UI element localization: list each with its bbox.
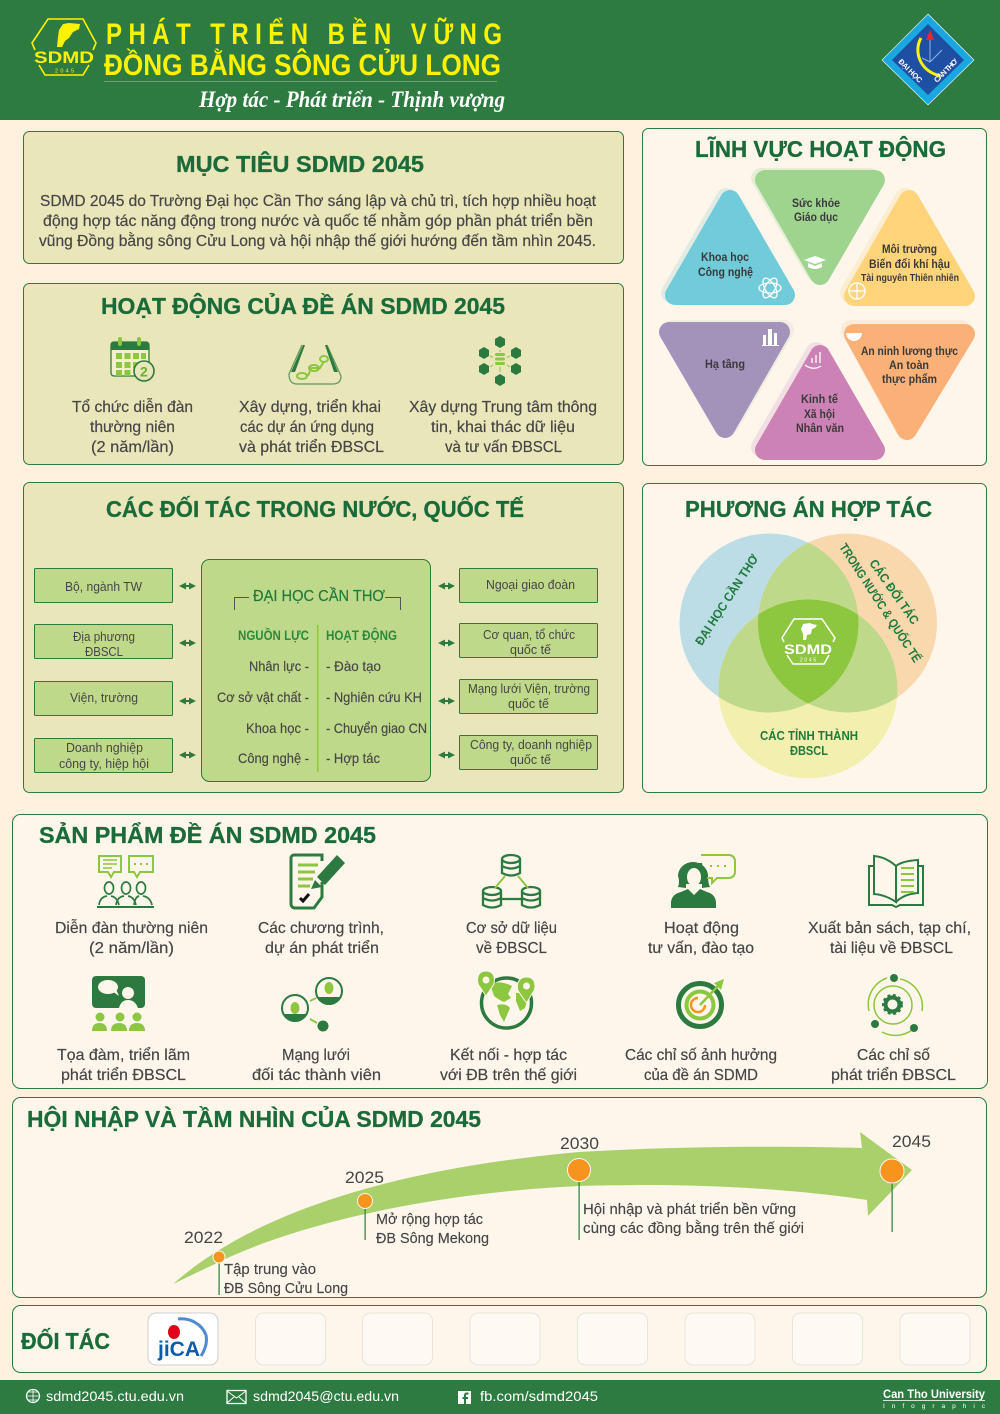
text: dự án [239, 398, 384, 456]
centre box: Đại học Cần Thơ: Công nghệ - [238, 750, 309, 766]
box: Viện trường: Viện, trường [70, 690, 138, 705]
item: chương trình: dự án phát triển [265, 939, 379, 957]
item: chỉ số ảnh hưởng: của đề án SDMD [644, 1067, 758, 1084]
text: diễn đàn: (2 năm/lần) [91, 439, 174, 456]
text: diễn đàn [72, 397, 193, 456]
triangle: môi trường: Môi trường [882, 242, 937, 256]
triangle: môi trường [849, 198, 965, 299]
item: chỉ số ảnh hưởng: Các chỉ số ảnh hưởng [625, 1047, 777, 1064]
item: kết nối: với ĐB trên thế giới [440, 1067, 577, 1084]
label: các tỉnh thành: ĐBSCL [790, 744, 828, 758]
item: mạng lưới [252, 978, 381, 1084]
timeline arrow [173, 1132, 912, 1284]
Can Tho University logo [882, 14, 974, 105]
text: mục tiêu: vũng Đồng bằng sông Cửu Long và hội nhập thế giới hướng đến tầm nhìn 2045. [39, 231, 596, 250]
item: tọa đàm [57, 976, 190, 1084]
title: PHÁT TRIỂN BỀN VỮNG [106, 16, 502, 51]
website: sdmd2045.ctu.edu.vn [46, 1388, 184, 1404]
header band [0, 0, 1000, 120]
text: mục tiêu [39, 193, 597, 250]
milestone: 2025 [345, 1168, 489, 1247]
item: cơ sở dữ liệu: Cơ sở dữ liệu [466, 920, 557, 937]
milestone: 2030: cùng các đồng bằng trên thế giới [583, 1220, 804, 1237]
milestone: 2030: 2030 [560, 1134, 599, 1153]
item: diễn đàn [55, 856, 208, 957]
item: mạng lưới: Mạng lưới [282, 1047, 350, 1064]
label: các đối tác: TRONG NƯỚC & QUỐC TẾ [836, 540, 925, 665]
credit: Can Tho University [883, 1387, 986, 1410]
item: chương trình [258, 855, 384, 957]
text: trung tâm: và tư vấn ĐBSCL [445, 439, 562, 456]
triangle: an ninh lương thực: An toàn [889, 358, 929, 372]
heading: phương án: PHƯƠNG ÁN HỢP TÁC [685, 495, 932, 522]
item: chỉ số phát triển: phát triển ĐBSCL [831, 1066, 956, 1084]
item: mạng lưới: đối tác thành viên [252, 1067, 381, 1084]
milestone: 2022 [184, 1228, 348, 1297]
triangle: an ninh lương thực [846, 330, 965, 430]
box: Cơ quan: Cơ quan, tổ chức [483, 627, 575, 642]
item: tọa đàm: Tọa đàm, triển lãm [57, 1046, 190, 1064]
panel: đối tác [12, 1306, 986, 1372]
heading: đối tác: ĐỐI TÁC [21, 1327, 110, 1354]
triangle: sức khỏe giáo dục: Sức khỏe [792, 196, 840, 210]
text: trung tâm: Xây dựng Trung tâm thông [409, 399, 597, 416]
item: chỉ số phát triển [831, 974, 956, 1084]
box: Địa phương: ĐBSCL [85, 644, 123, 659]
partner logo: JICA: jiCA [157, 1338, 200, 1361]
arrows: left [179, 582, 196, 758]
panel: hội nhập [12, 1098, 986, 1298]
centre box: Đại học Cần Thơ [202, 560, 430, 782]
milestone: 2025: 2025 [345, 1168, 384, 1187]
heading: sản phẩm: SẢN PHẨM ĐỀ ÁN SDMD 2045 [39, 820, 376, 848]
triangle: sức khỏe giáo dục [761, 178, 875, 275]
item: cơ sở dữ liệu: về ĐBSCL [476, 940, 547, 957]
Can Tho University logo: ĐẠI HỌC [897, 57, 925, 85]
triangle: sức khỏe giáo dục: Giáo dục [794, 210, 838, 224]
SDMD logo: venn: SDMD [784, 641, 832, 657]
item: tư vấn [648, 855, 754, 957]
SDMD logo [32, 19, 96, 75]
triangle: an ninh lương thực: An ninh lương thực [861, 344, 958, 358]
triangle: kinh tế xã hội nhân văn: Kinh tế [801, 392, 838, 406]
centre box: Đại học Cần Thơ: HOẠT ĐỘNG [326, 628, 397, 643]
triangle: khoa học công nghệ: Công nghệ [698, 265, 753, 279]
email: sdmd2045@ctu.edu.vn [253, 1388, 399, 1404]
icon: calendar [111, 337, 154, 381]
box: Viện trường [34, 682, 172, 716]
item: xuất bản [808, 856, 971, 957]
panel: đối tác trong nước, quốc tế [24, 482, 624, 792]
SDMD logo: SDMD [34, 48, 94, 67]
text: trung tâm: tin, khai thác dữ liệu [431, 419, 575, 436]
triangle: kinh tế xã hội nhân văn [761, 352, 875, 450]
SDMD logo: venn [782, 619, 835, 664]
box: Công ty [460, 736, 598, 770]
partner logo: JICA [148, 1313, 218, 1365]
panel: sản phẩm [12, 814, 988, 1088]
item: chỉ số phát triển: Các chỉ số [857, 1047, 930, 1064]
triangle: hạ tầng [669, 329, 784, 428]
item: tư vấn: Hoạt động [664, 920, 739, 937]
SDMD logo: venn: 2045 [800, 658, 816, 664]
centre box: Đại học Cần Thơ: Nhân lực - [249, 658, 309, 674]
text: diễn đàn: thường niên [90, 419, 175, 436]
credit: Can Tho University: Can Tho University [883, 1387, 985, 1401]
panel: lĩnh vực hoạt động [642, 128, 986, 466]
title: ĐỒNG BẰNG SÔNG CỬU LONG [104, 48, 501, 82]
item: xuất bản: Xuất bản sách, tạp chí, [808, 920, 971, 937]
item: tọa đàm: phát triển ĐBSCL [61, 1066, 186, 1084]
label: các tỉnh thành [760, 728, 858, 758]
box: Doanh nghiệp: công ty, hiệp hội [59, 756, 149, 771]
centre box: Đại học Cần Thơ: - Chuyển giao CN [326, 720, 427, 736]
milestone: 2022: Tập trung vào [224, 1261, 316, 1278]
box: Công ty: Công ty, doanh nghiệp [470, 737, 592, 752]
milestone: 2022: ĐB Sông Cửu Long [224, 1280, 348, 1297]
slogan: Hợp tác - Phát triển - Thịnh vượng [198, 87, 505, 112]
triangle: an ninh lương thực: thực phẩm [882, 372, 937, 386]
triangle: kinh tế xã hội nhân văn: Xã hội [804, 407, 835, 421]
text: mục tiêu: SDMD 2045 do Trường Đại học Cần Thơ sáng lập và chủ trì, tích hợp nhiều hoạt [40, 193, 597, 210]
milestone: 2022: 2022 [184, 1228, 223, 1247]
heading: lĩnh vực: LĨNH VỰC HOẠT ĐỘNG [695, 135, 946, 162]
centre box: Đại học Cần Thơ: - Nghiên cứu KH [326, 689, 422, 705]
item: kết nối: Kết nối - hợp tác [450, 1047, 567, 1064]
box: Địa phương [34, 624, 172, 659]
box: Công ty: quốc tế [510, 752, 552, 767]
text: dự án: và phát triển ĐBSCL [239, 438, 384, 456]
milestone: 2045 [880, 1132, 931, 1232]
box: Ngoại giao đoàn [460, 568, 598, 602]
heading: mục tiêu: MỤC TIÊU SDMD 2045 [176, 150, 424, 177]
triangle: môi trường: Biến đổi khí hậu [869, 257, 950, 271]
icon: map route [289, 345, 341, 384]
centre box: Đại học Cần Thơ: - Hợp tác [326, 750, 380, 766]
item: diễn đàn: Diễn đàn thường niên [55, 918, 208, 937]
panel: phương án hợp tác [642, 484, 986, 792]
milestone: 2030: Hội nhập và phát triển bền vững [583, 1201, 796, 1218]
text: diễn đàn: Tổ chức diễn đàn [72, 397, 193, 416]
item: chương trình: Các chương trình, [258, 920, 384, 937]
text: dự án: Xây dựng, triển khai [239, 398, 381, 416]
box: Doanh nghiệp: Doanh nghiệp [66, 740, 143, 755]
box: Mạng lưới [460, 680, 598, 714]
box: Cơ quan: quốc tế [510, 642, 552, 657]
box: Bộ ngành [34, 568, 172, 602]
triangle: môi trường: Tài nguyên Thiên nhiên [861, 272, 959, 284]
arrows: right [438, 582, 455, 758]
box: Địa phương: Địa phương [73, 629, 135, 644]
triangle: khoa học công nghệ: Khoa học [701, 250, 749, 264]
panel: mục tiêu [24, 132, 624, 264]
centre box: Đại học Cần Thơ: - Đào tạo [326, 658, 381, 674]
item: kết nối [440, 971, 577, 1084]
text: dự án: các dự án ứng dụng [240, 419, 374, 436]
item: cơ sở dữ liệu [466, 855, 557, 957]
label: các đối tác: CÁC ĐỐI TÁC [866, 556, 922, 627]
partner placeholders [256, 1313, 970, 1365]
footer band [0, 1380, 1000, 1414]
title [104, 16, 502, 82]
Can Tho University logo: CẦN THƠ [931, 56, 960, 84]
heading: hội nhập: HỘI NHẬP VÀ TẦM NHÌN CỦA SDMD 2045 [27, 1104, 481, 1132]
centre box: Đại học Cần Thơ: Khoa học - [246, 720, 309, 736]
item: chỉ số ảnh hưởng [625, 979, 777, 1084]
panel: hoạt động [24, 284, 624, 464]
box: Cơ quan [460, 624, 598, 658]
box: Mạng lưới: Mạng lưới Viện, trường [468, 681, 590, 696]
item: tư vấn: tư vấn, đào tạo [648, 940, 754, 957]
box: Bộ ngành: Bộ, ngành TW [65, 579, 143, 594]
milestone: 2025: ĐB Sông Mekong [376, 1230, 489, 1247]
milestone: 2025: Mở rộng hợp tác [376, 1211, 483, 1228]
venn diagram [680, 534, 937, 778]
item: diễn đàn: (2 năm/lần) [89, 940, 174, 957]
label: các tỉnh thành: CÁC TỈNH THÀNH [760, 728, 858, 743]
centre box: Đại học Cần Thơ: NGUỒN LỰC [238, 628, 309, 643]
credit: Can Tho University: Infographic [883, 1403, 986, 1410]
text: mục tiêu: động hợp tác năng động trong nước và quốc tế nhằm góp phần phát triển bền [43, 211, 593, 230]
label: đại học cần thơ: ĐẠI HỌC CẦN THƠ [692, 551, 762, 648]
triangle: khoa học công nghệ [671, 198, 785, 300]
milestone: 2045: 2045 [892, 1132, 931, 1151]
facebook: fb.com/sdmd2045 [480, 1388, 598, 1404]
milestone: 2030 [560, 1134, 804, 1240]
centre box: Đại học Cần Thơ: Cơ sở vật chất - [217, 689, 309, 705]
item: xuất bản: tài liệu về ĐBSCL [830, 940, 953, 957]
heading: hoạt động: HOẠT ĐỘNG CỦA ĐỀ ÁN SDMD 2045 [101, 291, 505, 319]
triangle: hạ tầng: Hạ tầng [705, 357, 745, 371]
triangle: kinh tế xã hội nhân văn: Nhân văn [796, 421, 844, 435]
box: Ngoại giao đoàn: Ngoại giao đoàn [486, 577, 575, 592]
centre box: Đại học Cần Thơ: ĐẠI HỌC CẦN THƠ [253, 586, 385, 605]
SDMD logo: 2045 [55, 68, 74, 74]
icon: data centre [479, 336, 521, 386]
icon: calendar: 2 [140, 364, 148, 380]
box: Doanh nghiệp [34, 738, 172, 772]
text: trung tâm [409, 399, 597, 456]
heading: đối tác: CÁC ĐỐI TÁC TRONG NƯỚC, QUỐC TẾ [106, 495, 524, 522]
box: Mạng lưới: quốc tế [508, 696, 550, 711]
